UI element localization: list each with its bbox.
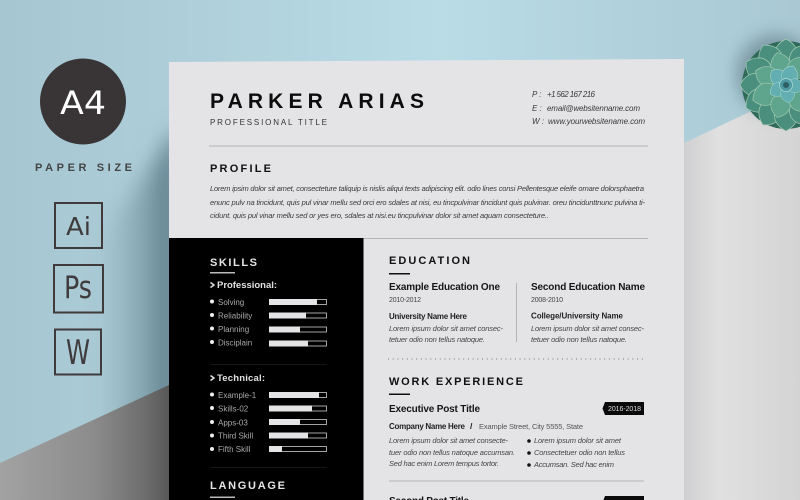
education entry two	[531, 282, 645, 344]
contact details: P :	[532, 90, 541, 99]
education entry one: 2010-2012	[389, 297, 421, 304]
date tag: 2016-2018	[608, 406, 641, 413]
icon: Illustrator	[55, 203, 102, 248]
education entry two: tetuer odio non tellus natoque.	[531, 335, 627, 344]
panel: black sidebar	[169, 238, 364, 500]
education entry one: Lorem ipsum dolor sit amet consec-	[389, 324, 504, 333]
job entry one: Lorem ipsum dolor sit amet consecte-	[389, 436, 508, 445]
profile heading: PROFILE	[210, 163, 271, 175]
education section	[389, 255, 645, 344]
job entry one: /	[470, 421, 473, 431]
technical skills: Fifth Skill	[218, 445, 251, 454]
professional title: PROFESSIONAL TITLE	[210, 118, 327, 127]
work experience section	[389, 376, 644, 500]
job entry one: Company Name Here	[389, 422, 466, 431]
paper size label: PAPER SIZE	[35, 162, 132, 174]
job entry one: Example Street, City 5555, State	[479, 422, 583, 431]
education entry two: Second Education Name	[531, 282, 645, 293]
technical skills: Example-1	[218, 391, 257, 400]
date tag	[602, 402, 644, 415]
job entry one: Consectetuer odio non tellus	[534, 448, 625, 457]
contact details	[532, 90, 645, 126]
education heading: EDUCATION	[389, 255, 470, 267]
icon: Word: W	[66, 333, 90, 373]
profile paragraph	[210, 184, 646, 220]
job entry one: tuer odio non tellus natoque accumsan.	[389, 448, 515, 457]
shadow behind the plant	[736, 34, 800, 114]
professional skills: Planning	[218, 325, 249, 334]
job entry two	[389, 496, 644, 500]
education entry one: University Name Here	[389, 312, 468, 321]
icon: Word	[55, 330, 101, 374]
shadow left of the paper	[100, 125, 180, 500]
contact details: +1 562 167 216	[547, 90, 596, 99]
profile paragraph: Lorem ipsim dolor sit amet, consecteture taliquip is nislis aliqui texts adipiscing elit. odio lines consi Pellentesque eleife ornare dolorsphaetra	[210, 184, 644, 193]
contact details: email@websitenname.com	[547, 104, 640, 113]
education entry one	[389, 282, 504, 344]
profile paragraph: cidunt. quis pul vinar mellu sed or yes ero, sdales at nisi.eu tincpulvinar dolor sit amet aquam consecteture..	[210, 211, 549, 220]
technical skills: Third Skill	[218, 432, 253, 440]
header: name and title	[210, 90, 424, 127]
background: grey lower-left wedge	[0, 385, 169, 500]
paper sheet	[169, 59, 684, 500]
technical skills: Skills-02	[218, 404, 249, 414]
A4 badge: A4	[60, 84, 106, 122]
professional skills	[210, 280, 326, 348]
icon: Illustrator: Ai	[66, 212, 91, 241]
professional skills: Reliability	[218, 312, 252, 320]
job entry one: Sed hac enim Lorem tempus tortor.	[389, 459, 499, 468]
job entry one	[389, 402, 644, 469]
education entry two: 2008-2010	[531, 297, 563, 304]
contact details: W :	[532, 117, 544, 126]
professional skills: Disciplain	[218, 338, 252, 348]
skills heading: SKILLS	[210, 257, 257, 269]
technical skills	[210, 373, 326, 454]
contact details: www.yourwebsitename.com	[548, 117, 645, 126]
professional skills: Professional:	[217, 280, 277, 291]
job entry one: Accumsan. Sed hac enim	[533, 460, 614, 469]
profile paragraph: enunc pulv na tincidunt, quis pul vinar mellu sed orci ero sdales at nisi, eu tincpulvinar tincidunt quis pulvinar. oreu tincidunttnunc pulvina ti-	[210, 198, 646, 207]
education entry two: Lorem ipsum dolor sit amet consec-	[531, 324, 644, 333]
language heading: LANGUAGE	[210, 480, 285, 492]
icon: Photoshop	[54, 265, 103, 312]
name: PARKER ARIAS	[210, 90, 424, 113]
job entry one: Executive Post Title	[389, 404, 480, 415]
work experience heading: WORK EXPERIENCE	[389, 376, 523, 388]
professional skills: Solving	[218, 298, 244, 307]
job entry one: Lorem ipsum dolor sit amet	[534, 436, 622, 445]
contact details: E :	[532, 104, 542, 113]
technical skills: Apps-03	[218, 418, 248, 428]
technical skills: Technical:	[217, 373, 265, 384]
background: light grey right wedge	[684, 88, 800, 500]
profile section	[210, 163, 646, 220]
A4 badge	[40, 58, 126, 144]
icon: Photoshop: Ps	[64, 270, 92, 306]
education entry one: Example Education One	[389, 282, 500, 293]
education entry one: tetuer odio non tellus natoque.	[389, 335, 485, 344]
icon: succulent plant	[740, 39, 800, 131]
education entry two: College/University Name	[531, 312, 624, 320]
